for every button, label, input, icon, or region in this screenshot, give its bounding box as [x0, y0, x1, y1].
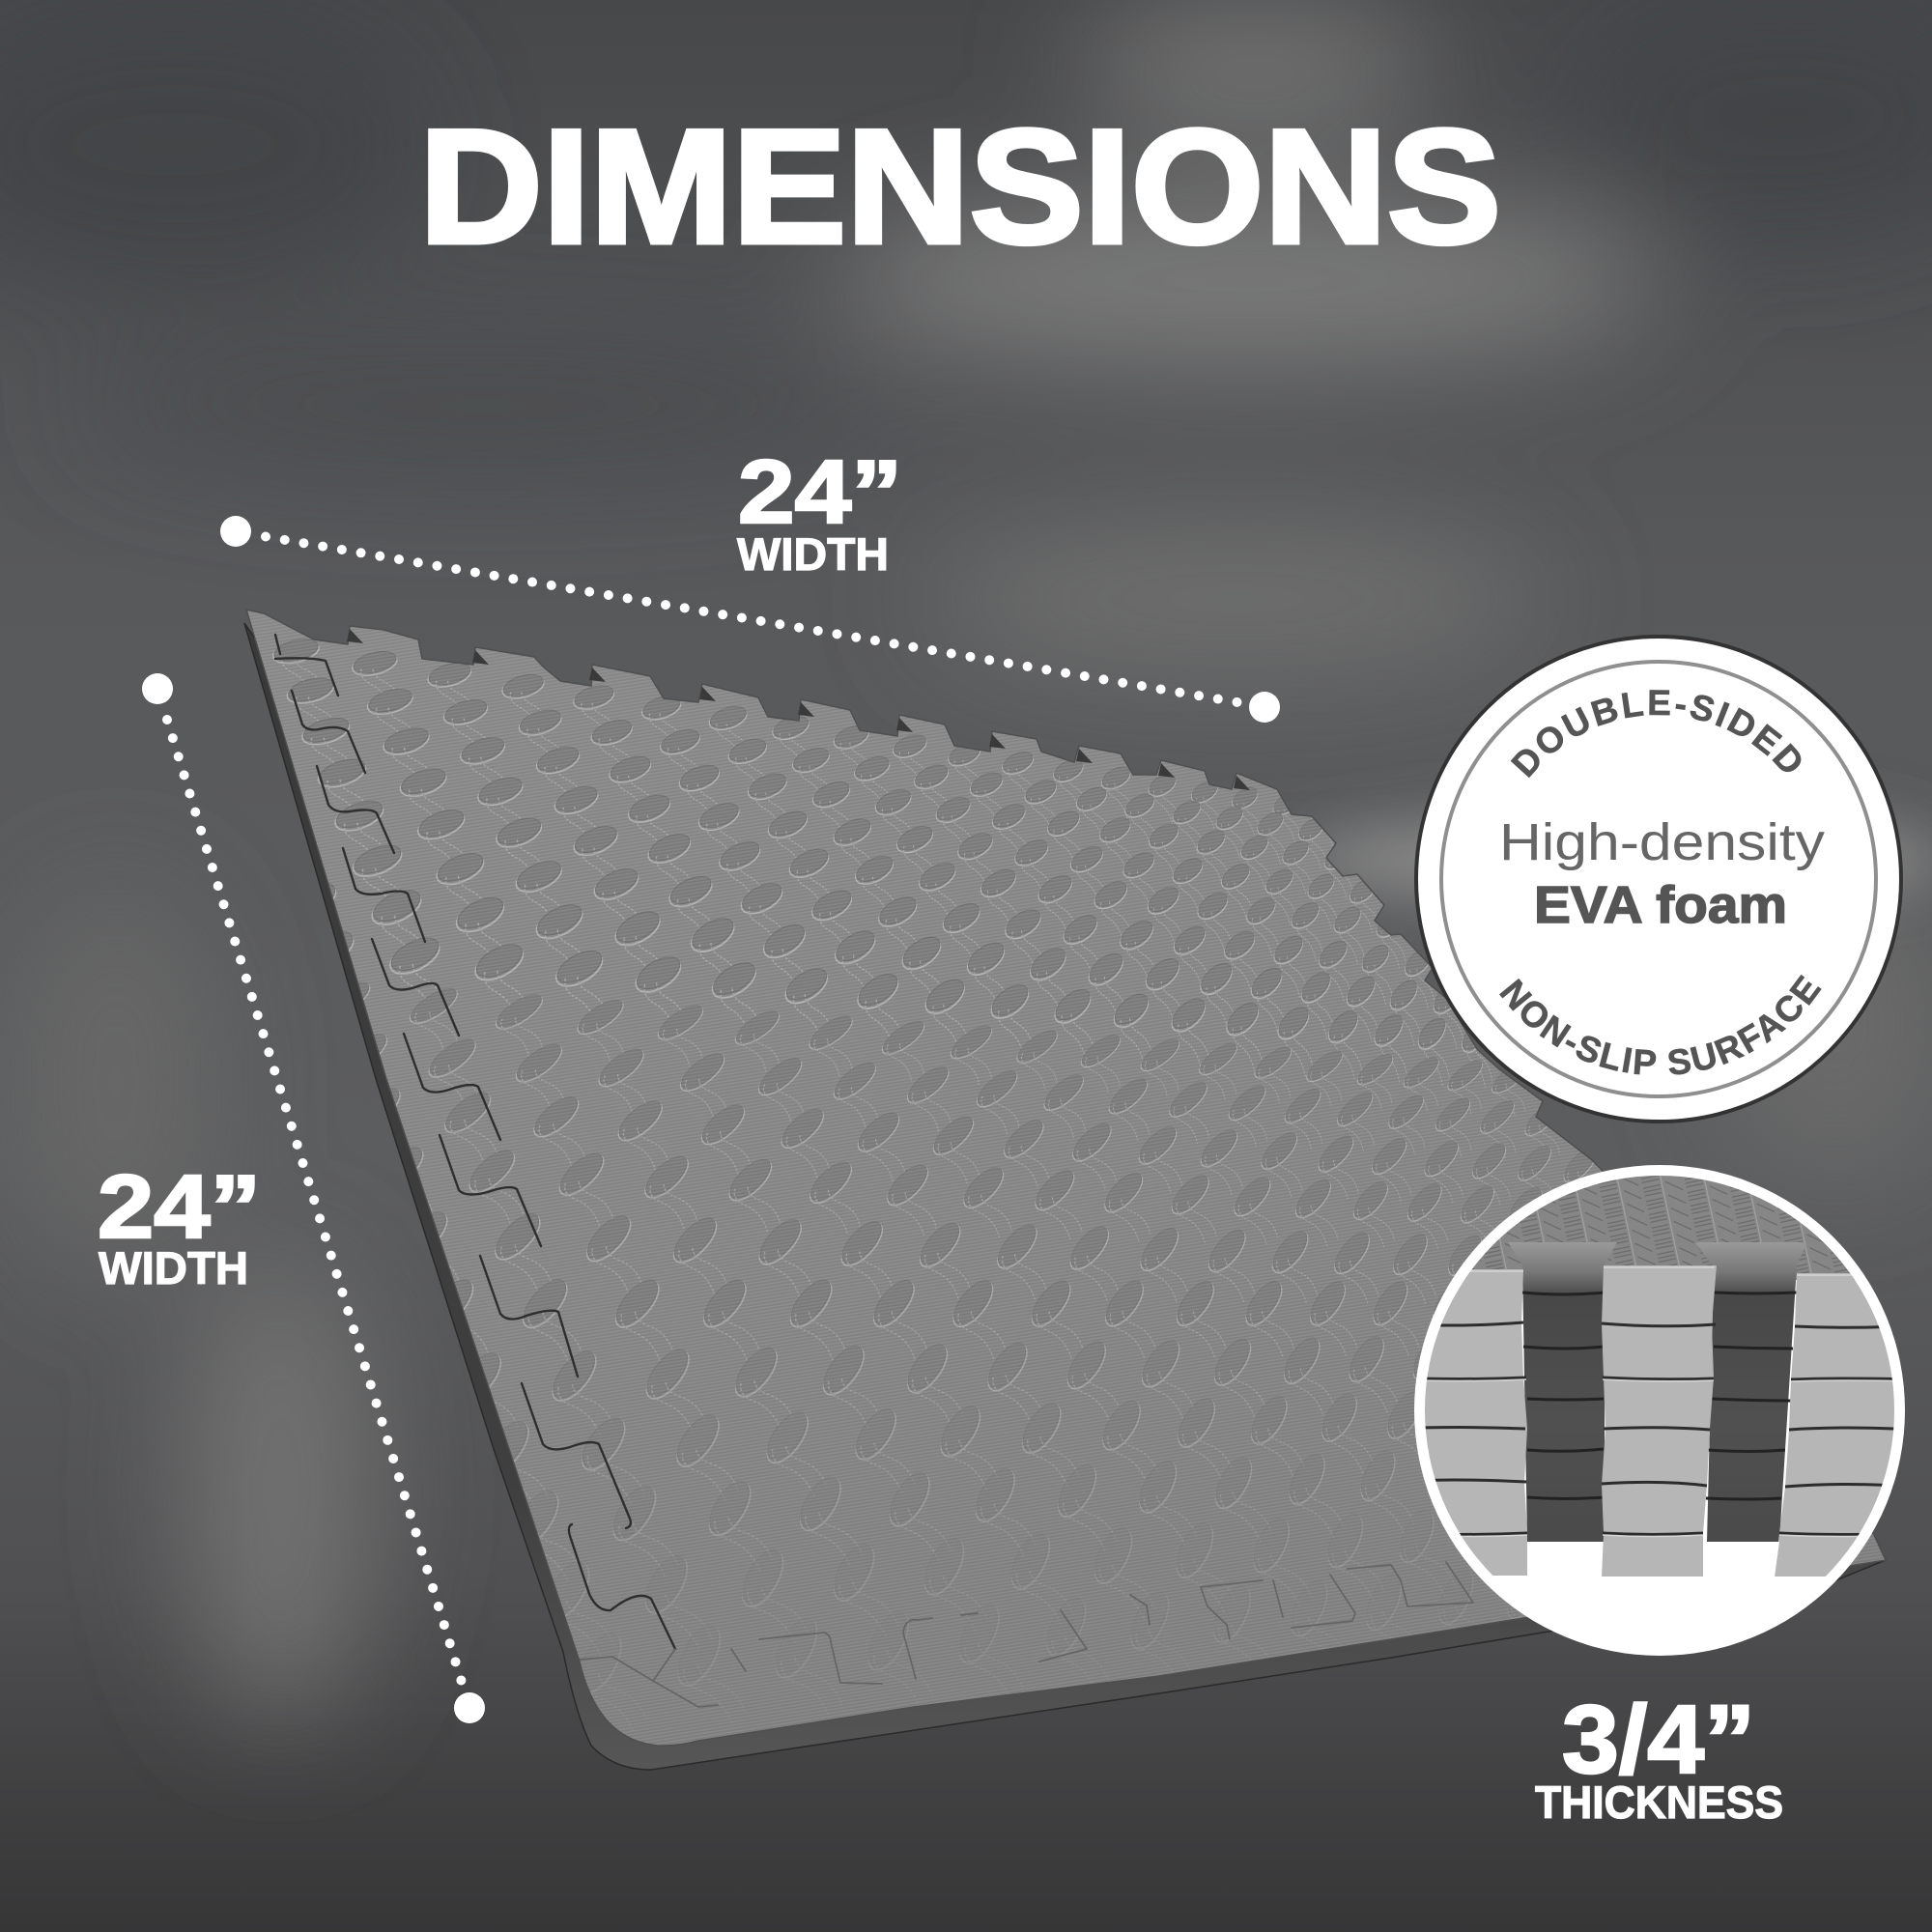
badge arc text bottom: NON-SLIP SURFACE [1499, 974, 1822, 1074]
mat outline [246, 610, 1886, 1746]
inset layer separators [1391, 1322, 1913, 1534]
label: 3/4 inch thickness: THICKNESS [1535, 1776, 1783, 1828]
foam mat tile [187, 599, 1932, 1770]
label: 24 inch width left: 24” [98, 1156, 261, 1257]
badge arc text top: DOUBLE-SIDED [1511, 690, 1801, 779]
mat side thickness [244, 623, 1886, 1770]
inset light foam columns [1391, 1265, 1913, 1577]
mat top surface with embossed texture [187, 599, 1932, 1758]
label: 3/4 inch thickness [1535, 1686, 1783, 1828]
inset: foam thickness close-up [1391, 1159, 1922, 1662]
width dimension line top [220, 516, 1280, 723]
badge bold line: EVA foam [1534, 876, 1787, 934]
interlocking seam left [275, 635, 675, 1649]
inset white base [1602, 1542, 1826, 1577]
label: 3/4 inch thickness: 3/4” [1562, 1686, 1755, 1794]
title: DIMENSIONS [419, 96, 1501, 277]
badge: high-density EVA foam [1414, 635, 1903, 1123]
label: 24 inch width top: 24” [738, 441, 902, 542]
label: 24 inch width top: WIDTH [737, 528, 889, 580]
label: 24 inch width left: WIDTH [99, 1242, 248, 1293]
mat notch shadows [347, 629, 1250, 790]
badge main line: High-density [1499, 813, 1825, 871]
inset top surface [1464, 1176, 1855, 1280]
label: 24 inch width left [98, 1156, 261, 1293]
label: 24 inch width top [737, 441, 902, 580]
interlocking seam bottom [580, 1562, 1473, 1707]
inset dark recessed columns [1508, 1242, 1806, 1542]
width dimension line left [142, 673, 485, 1723]
inset layer highlights [1427, 1266, 1892, 1538]
